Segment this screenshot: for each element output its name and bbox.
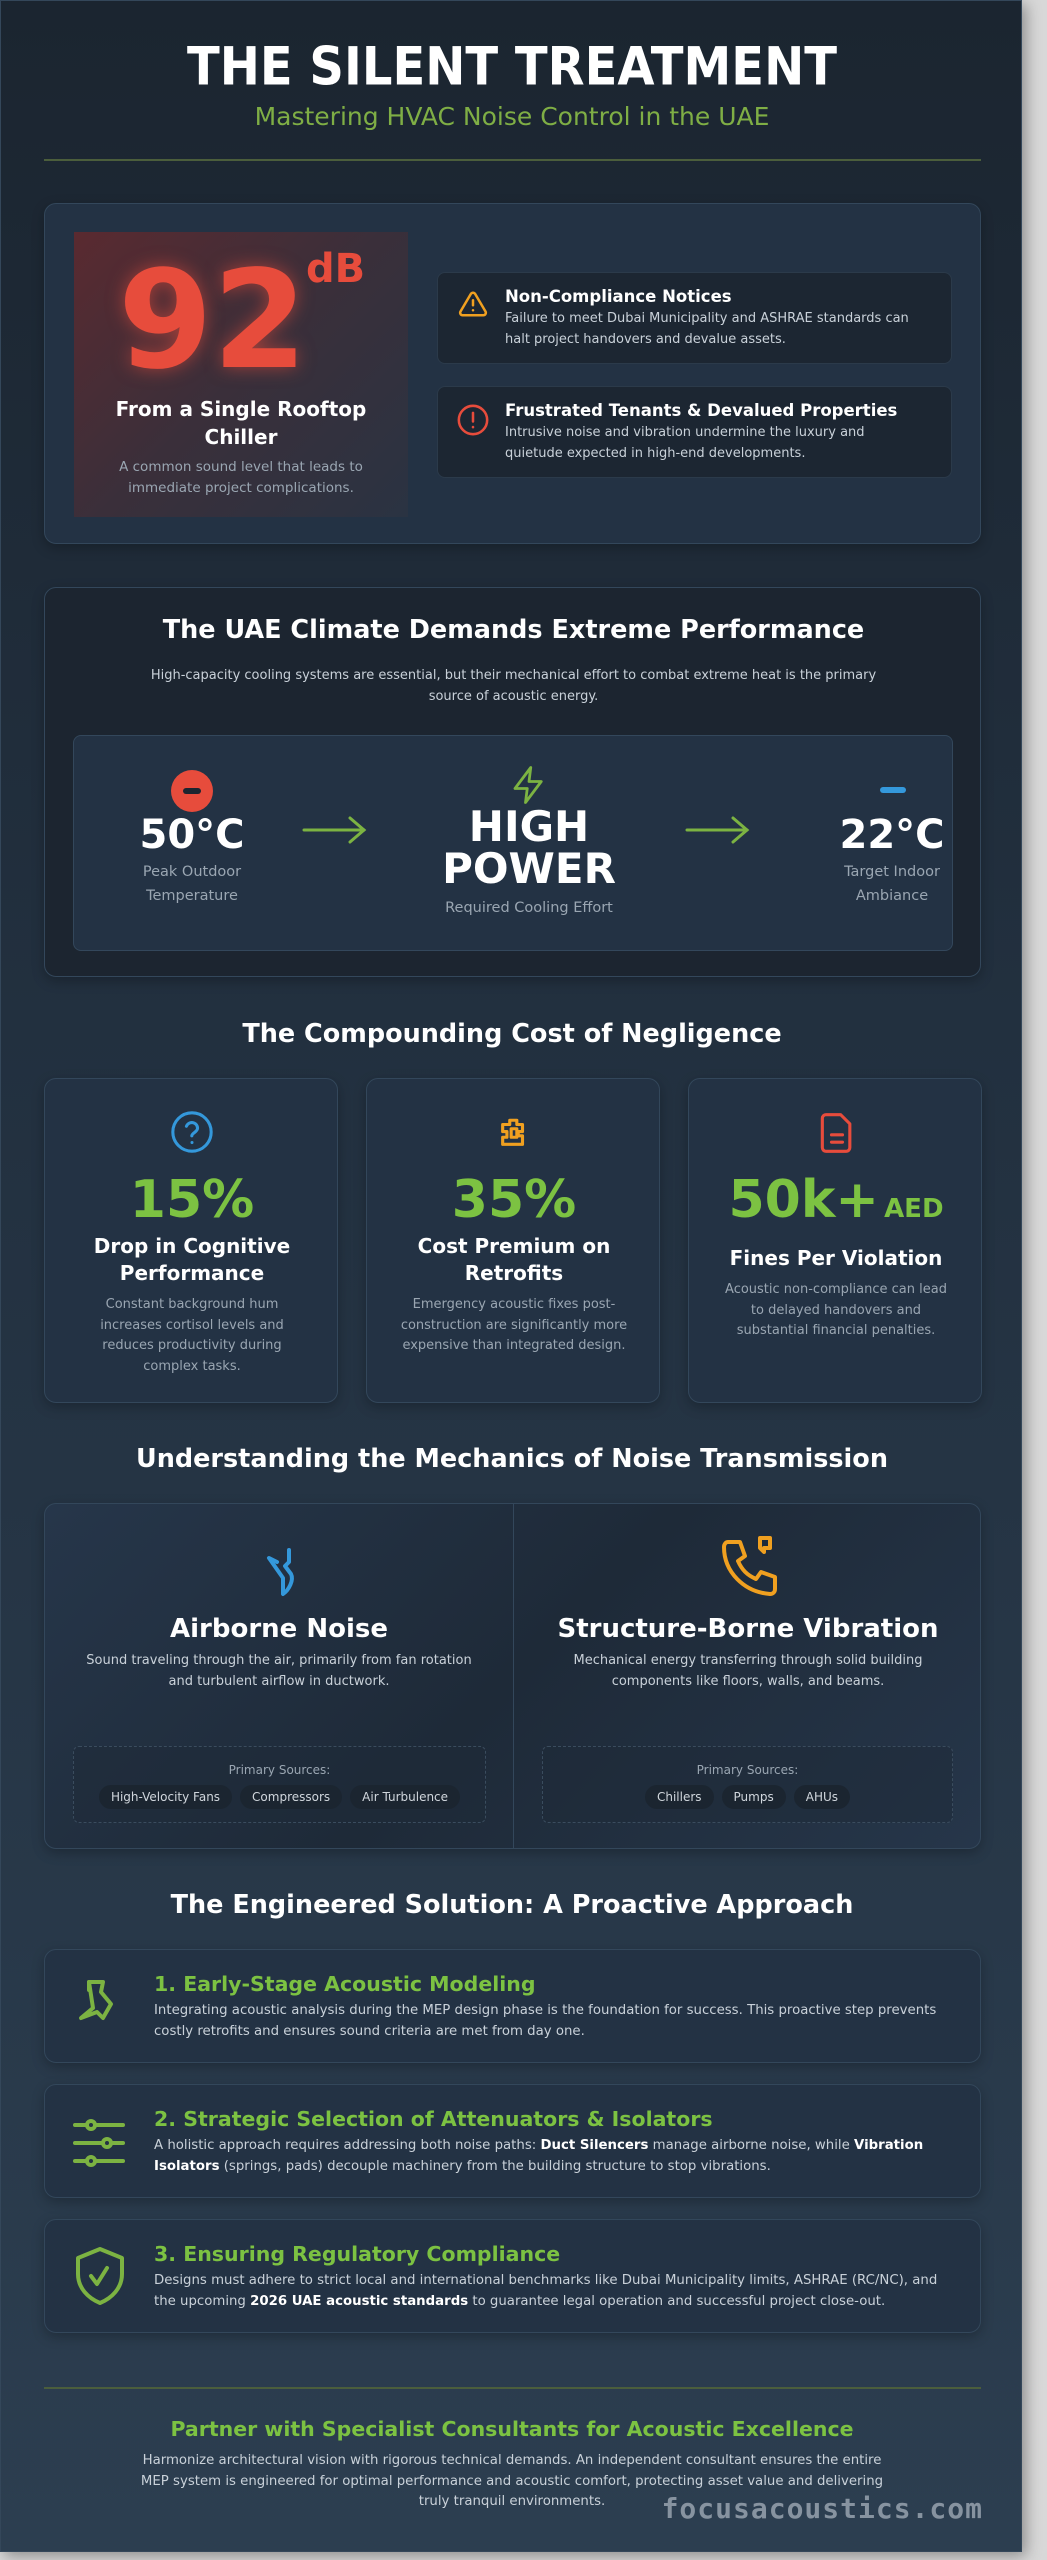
card text xyxy=(94,1170,290,1374)
description xyxy=(86,1653,472,1689)
panel: hero xyxy=(44,203,981,544)
title: THE SILENT TREATMENT xyxy=(187,36,837,98)
stat: 22C: Ambiance xyxy=(856,888,928,904)
brand: focusacoustics.com xyxy=(662,2492,983,2525)
stat: high power: Required Cooling Effort xyxy=(445,900,613,916)
card text: 35% xyxy=(452,1170,576,1230)
stat description: immediate project complications. xyxy=(128,480,354,496)
title: Structure-Borne Vibration xyxy=(557,1614,939,1644)
stat description: A common sound level that leads to xyxy=(119,459,363,475)
footer heading: Partner with Specialist Consultants for Acoustic Excellence xyxy=(170,2417,854,2441)
step text xyxy=(154,1972,936,2038)
card text: substantial financial penalties. xyxy=(737,1323,935,1338)
stat box: 92 dB xyxy=(74,232,408,517)
unit: dB xyxy=(306,246,365,292)
card text: Fines Per Violation xyxy=(730,1246,942,1270)
description: and turbulent airflow in ductwork. xyxy=(168,1674,389,1689)
description: Sound traveling through the air, primarily from fan rotation xyxy=(86,1653,472,1668)
step 1 xyxy=(44,1949,981,2063)
panel: climate xyxy=(44,587,981,977)
card text xyxy=(505,287,909,347)
sources box xyxy=(73,1746,486,1823)
icon: cool xyxy=(880,787,906,793)
footer text: MEP system is engineered for optimal performance and acoustic comfort, protecting asset value and delivering xyxy=(141,2474,883,2488)
icon: question xyxy=(171,1111,213,1153)
column: structure xyxy=(542,1536,953,1823)
icon: sliders xyxy=(73,2119,125,2167)
stat label: Chiller xyxy=(205,425,277,449)
subtitle: Mastering HVAC Noise Control in the UAE xyxy=(255,102,769,131)
arrow xyxy=(686,816,750,844)
step 3 xyxy=(44,2219,981,2333)
card text: 50k+ AED xyxy=(728,1170,944,1230)
step text: costly retrofits and ensures sound criteria are met from day one. xyxy=(154,2024,585,2038)
column: airborne xyxy=(73,1548,486,1823)
icon: alert circle xyxy=(458,404,488,436)
step text: Integrating acoustic analysis during the MEP design phase is the foundation for success. This proactive step prevents xyxy=(154,2003,936,2018)
card text xyxy=(505,401,897,461)
stat: 22C: Target Indoor xyxy=(844,864,940,880)
card: fines xyxy=(688,1078,982,1403)
stat: 22C xyxy=(839,812,945,904)
stat: 50C: Peak Outdoor xyxy=(143,864,241,880)
stat description xyxy=(119,459,363,496)
card text: Constant background hum xyxy=(106,1297,278,1312)
sources box: Chillers xyxy=(657,1790,702,1804)
panel: transmission xyxy=(44,1503,981,1849)
stat: high power: HIGH xyxy=(469,802,589,851)
footer text xyxy=(141,2453,883,2509)
stat: 22C: 22°C xyxy=(839,812,945,858)
card text: increases cortisol levels and xyxy=(100,1318,284,1332)
icon: wind xyxy=(266,1548,294,1596)
card text: Retrofits xyxy=(465,1261,563,1285)
card text: expensive than integrated design. xyxy=(402,1338,626,1353)
icon: document xyxy=(820,1113,852,1153)
arrow xyxy=(302,816,366,844)
step text: 1. Early-Stage Acoustic Modeling xyxy=(154,1972,536,1996)
big number: 92 xyxy=(118,242,307,400)
card text xyxy=(725,1170,947,1338)
stat: 50C: 50°C xyxy=(139,812,245,858)
stat: 50C xyxy=(139,812,245,904)
card text: Intrusive noise and vibration undermine the luxury and xyxy=(505,425,865,440)
card text: construction are significantly more xyxy=(401,1318,627,1332)
heading: solution: The Engineered Solution: A Proactive Approach xyxy=(171,1890,853,1920)
icon: modeling xyxy=(79,1980,113,2020)
icon: lightning xyxy=(514,766,543,804)
card: tenants xyxy=(437,386,952,478)
stat label xyxy=(116,397,366,449)
step text xyxy=(154,2107,923,2174)
card text: reduces productivity during xyxy=(102,1338,282,1353)
step text: 2. Strategic Selection of Attenuators & Isolators xyxy=(154,2107,713,2131)
footer text: Harmonize architectural vision with rigorous technical demands. An independent consultant ensures the entire xyxy=(143,2453,881,2468)
card text xyxy=(401,1170,627,1353)
sources box: Pumps xyxy=(734,1790,774,1804)
description: Mechanical energy transferring through solid building xyxy=(573,1653,922,1668)
description: High-capacity cooling systems are essential, but their mechanical effort to combat extreme heat is the primary source of acoustic energy. xyxy=(151,668,876,704)
step text: Designs must adhere to strict local and international benchmarks like Dubai Municipality limits, ASHRAE (RC/NC), and xyxy=(154,2273,937,2288)
sources box: Air Turbulence xyxy=(362,1790,448,1804)
card: non-compliance xyxy=(437,272,952,364)
card text: complex tasks. xyxy=(143,1358,241,1374)
card text: Drop in Cognitive xyxy=(94,1234,290,1258)
step text xyxy=(154,2242,937,2308)
heading: mechanics: Understanding the Mechanics of Noise Transmission xyxy=(136,1444,888,1474)
card text: Frustrated Tenants & Devalued Properties xyxy=(505,401,897,420)
card text: quietude expected in high-end developments. xyxy=(505,446,805,461)
heading: The UAE Climate Demands Extreme Performance xyxy=(163,615,864,645)
card: cognitive xyxy=(44,1078,338,1403)
icon: puzzle xyxy=(501,1118,524,1146)
icon: warning xyxy=(458,292,488,316)
description xyxy=(573,1653,922,1689)
icon: phone vibration xyxy=(722,1536,777,1596)
card text: 15% xyxy=(130,1170,254,1230)
card text: Emergency acoustic fixes post- xyxy=(413,1297,615,1312)
stat label: From a Single Rooftop xyxy=(116,397,366,421)
stat: high power: POWER xyxy=(442,844,616,893)
icon: hot xyxy=(171,770,213,812)
step text: Isolators (springs, pads) decouple machinery from the building structure to stop vibrations. xyxy=(154,2158,771,2174)
sources box: High-Velocity Fans xyxy=(111,1790,220,1804)
sources box: Primary Sources: xyxy=(229,1763,330,1777)
step text: A holistic approach requires addressing both noise paths: Duct Silencers manage airborne noise, while Vibration xyxy=(154,2138,923,2153)
sources box: Primary Sources: xyxy=(697,1763,798,1777)
heading: cost: The Compounding Cost of Negligence xyxy=(242,1019,782,1049)
card text: Cost Premium on xyxy=(418,1234,610,1258)
title: Airborne Noise xyxy=(170,1614,388,1644)
sources box xyxy=(542,1746,953,1823)
card text: to delayed handovers and xyxy=(751,1302,921,1318)
card: retrofit xyxy=(366,1078,660,1403)
step text: the upcoming 2026 UAE acoustic standards to guarantee legal operation and successful project close-out. xyxy=(154,2294,885,2308)
card text: Acoustic non-compliance can lead xyxy=(725,1282,947,1297)
sources box: Compressors xyxy=(252,1790,330,1804)
step text: 3. Ensuring Regulatory Compliance xyxy=(154,2242,560,2266)
card text: Failure to meet Dubai Municipality and ASHRAE standards can halt project handovers and devalue assets. xyxy=(505,311,909,347)
stat: 50C: Temperature xyxy=(146,888,238,904)
card text: Non-Compliance Notices xyxy=(505,287,732,306)
step 2 xyxy=(44,2084,981,2198)
flow diagram xyxy=(73,735,953,951)
sources box: AHUs xyxy=(806,1790,838,1804)
stat: high power xyxy=(442,802,616,916)
icon: shield check xyxy=(76,2247,124,2305)
description: components like floors, walls, and beams. xyxy=(612,1674,884,1689)
footer text: truly tranquil environments. xyxy=(419,2494,605,2509)
card text: Performance xyxy=(120,1261,264,1285)
